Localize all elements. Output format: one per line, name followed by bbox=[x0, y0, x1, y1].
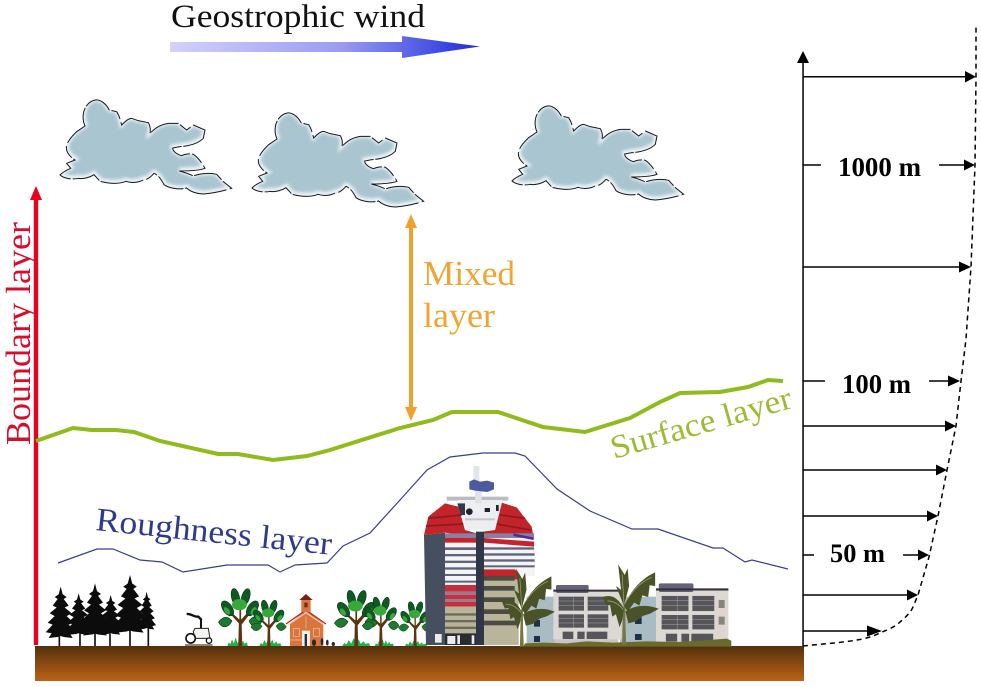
icon: schoolhouse bbox=[286, 594, 335, 646]
icon: tree group right bbox=[334, 589, 431, 646]
axis: height bbox=[797, 51, 809, 646]
arrow: boundary layer extent bbox=[30, 186, 42, 645]
line: surface layer top bbox=[36, 380, 783, 460]
icon: left cloud bbox=[60, 99, 232, 194]
arrow: geostrophic wind direction bbox=[170, 36, 480, 58]
icon: middle cloud bbox=[252, 112, 424, 207]
label: boundary layer: Boundary layer bbox=[0, 222, 38, 445]
label: mixed layer: layer bbox=[423, 297, 496, 335]
label: 100 m: 100 m bbox=[842, 369, 911, 399]
icon: palm tree right bbox=[603, 564, 659, 645]
label: 50 m: 50 m bbox=[830, 539, 885, 568]
arrows: wind speed at heights bbox=[803, 77, 966, 631]
clouds bbox=[60, 99, 684, 207]
tall red and white tower bbox=[424, 466, 535, 645]
low-rise buildings with palms bbox=[501, 564, 731, 647]
label: mixed layer: Mixed bbox=[423, 255, 515, 293]
title: geostrophic wind: Geostrophic wind bbox=[171, 0, 426, 35]
icon: right cloud bbox=[512, 105, 684, 200]
ground bbox=[35, 646, 804, 681]
curve: wind speed profile bbox=[803, 27, 976, 646]
line: roughness layer top bbox=[58, 453, 788, 572]
left low block bbox=[527, 597, 555, 644]
label: 1000 m: 1000 m bbox=[838, 152, 921, 182]
label: mixed layer bbox=[423, 255, 515, 335]
grass strip bbox=[523, 639, 731, 647]
trees and schoolhouse bbox=[218, 587, 431, 646]
central mast bbox=[447, 466, 508, 530]
icon: palm tree left bbox=[501, 569, 555, 647]
forest of pine trees bbox=[46, 575, 156, 646]
icon: tractor bbox=[185, 614, 213, 646]
arrow: mixed layer extent bbox=[405, 214, 417, 421]
red roof bbox=[424, 503, 534, 539]
label: surface layer: Surface layer bbox=[606, 381, 796, 467]
icon: tree group left bbox=[218, 587, 286, 646]
label: roughness layer: Roughness layer bbox=[94, 502, 334, 563]
wind profile bbox=[797, 27, 976, 646]
